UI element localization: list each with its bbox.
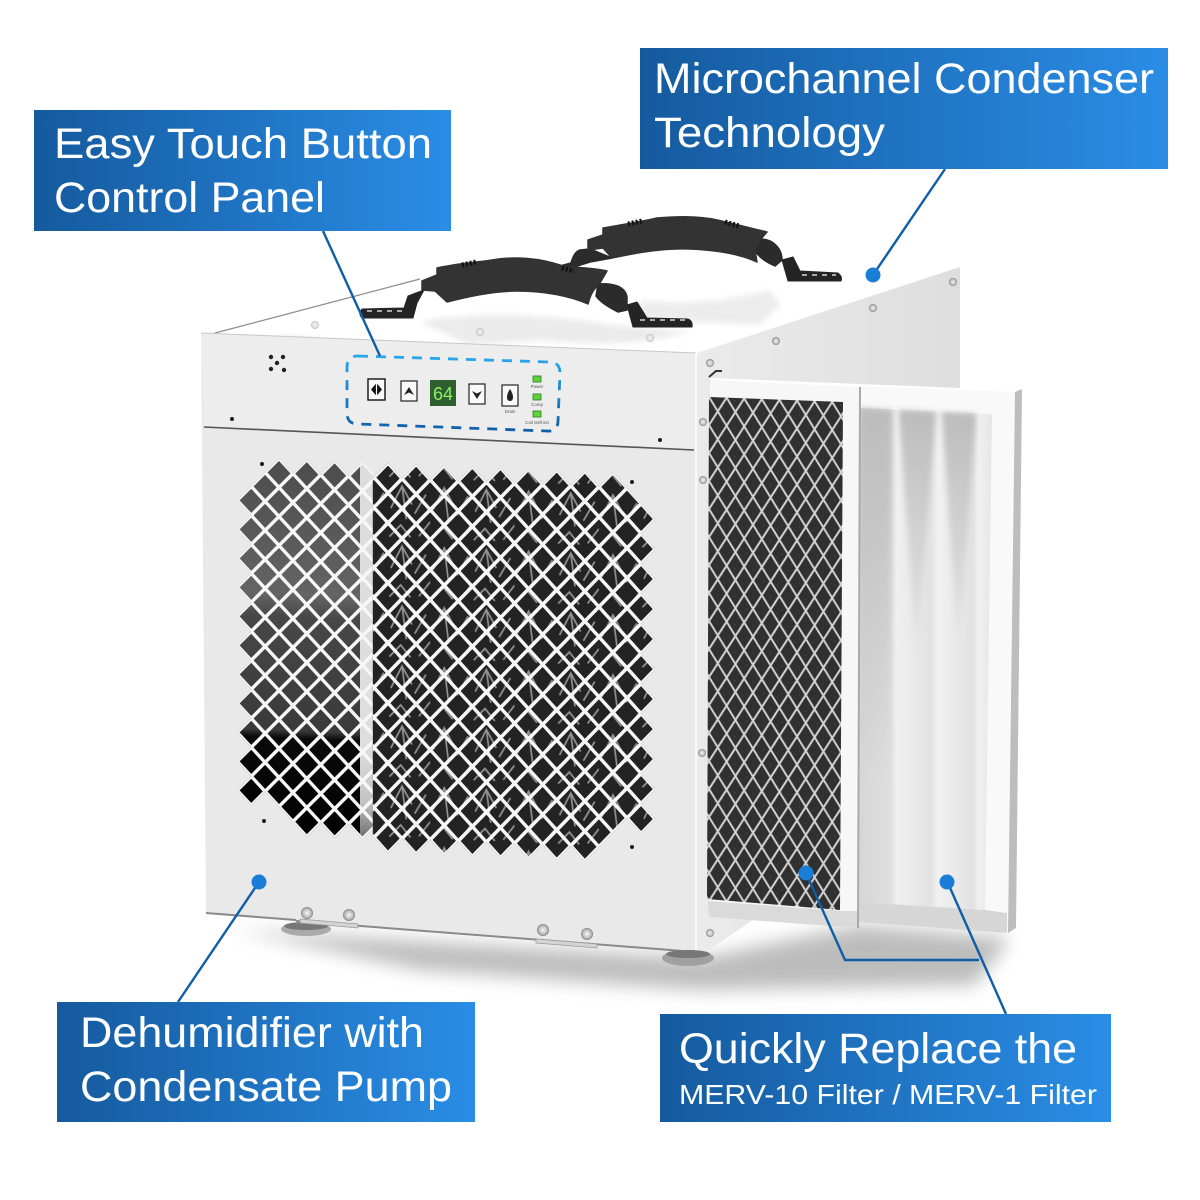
foot left xyxy=(281,922,331,936)
speaker holes xyxy=(269,355,286,372)
status lights: Power xyxy=(531,384,544,389)
handle: rear xyxy=(560,217,842,281)
label: condenser: Microchannel Condenser xyxy=(654,55,1154,103)
vent grille: left section xyxy=(237,458,373,839)
label: filters: Quickly Replace the xyxy=(679,1025,1077,1073)
label: condenser xyxy=(640,48,1168,169)
button: down xyxy=(469,384,485,404)
frame bottom xyxy=(858,902,1007,933)
label: condenser: Technology xyxy=(654,109,886,157)
frame side xyxy=(1008,389,1022,933)
top edge line xyxy=(215,279,420,333)
connector: filters xyxy=(798,866,1006,1014)
button: up xyxy=(401,381,417,401)
label: filters: MERV-10 Filter / MERV-1 Filter xyxy=(679,1079,1097,1110)
connector: control panel xyxy=(323,231,380,356)
front upper panel xyxy=(201,333,696,449)
status lights: Comp xyxy=(531,402,543,407)
status lights xyxy=(525,376,549,425)
carbon MERV-10 filter xyxy=(707,380,860,928)
label: pump: Condensate Pump xyxy=(80,1063,452,1111)
screws xyxy=(301,278,957,940)
label: pump: Dehumidifier with xyxy=(80,1009,424,1057)
label: filters xyxy=(660,1014,1111,1122)
pleats xyxy=(858,408,992,910)
label: control panel xyxy=(34,110,451,231)
callout: control panel highlight xyxy=(347,356,560,431)
foot right xyxy=(662,950,714,966)
outer frame xyxy=(858,386,1015,933)
button: drain: Drain xyxy=(505,409,516,414)
pleated MERV-1 filter xyxy=(858,386,1022,933)
label: control panel: Control Panel xyxy=(54,174,325,222)
control panel xyxy=(368,376,549,425)
front face xyxy=(201,333,696,952)
top face screws xyxy=(312,322,654,342)
frame xyxy=(709,380,860,928)
label: control panel: Easy Touch Button xyxy=(54,120,432,168)
top face reflections xyxy=(210,290,780,352)
handle: front xyxy=(360,258,692,327)
button: drain xyxy=(502,385,518,414)
display: 64 xyxy=(433,384,453,404)
latch xyxy=(709,371,722,377)
small holes xyxy=(230,417,662,849)
display xyxy=(430,380,456,406)
connector: condenser xyxy=(866,169,945,282)
button: power xyxy=(368,379,385,400)
side face xyxy=(697,267,960,958)
bottom clamps xyxy=(300,919,597,948)
connector: pump xyxy=(178,874,266,1002)
label: pump xyxy=(57,1002,475,1122)
floor shadow xyxy=(236,925,1010,990)
status lights: Coil Defrost xyxy=(525,420,549,425)
carbon mesh xyxy=(707,397,843,910)
vent grille: right section xyxy=(372,463,655,862)
product: dehumidifier xyxy=(178,172,1022,1001)
